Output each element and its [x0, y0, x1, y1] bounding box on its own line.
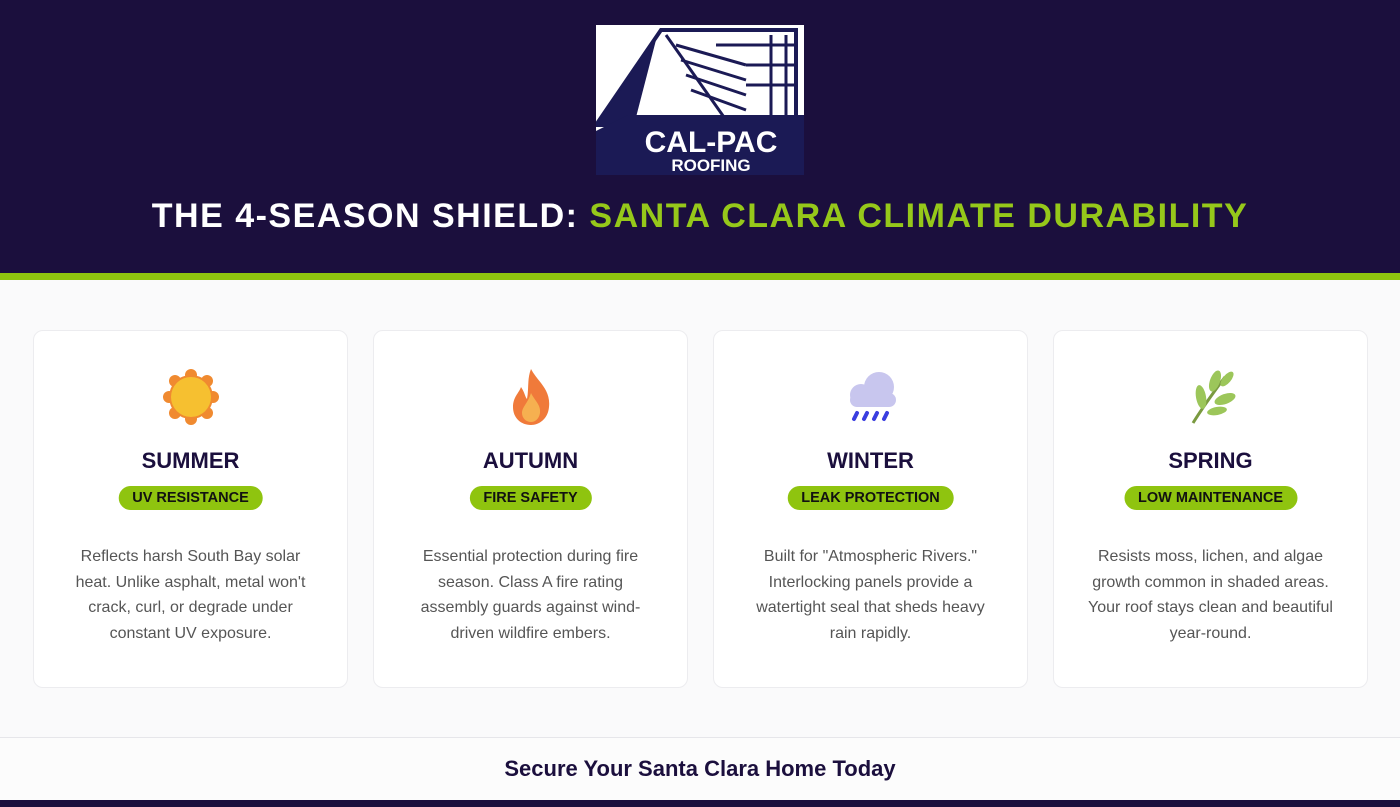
panel: winter: LEAK PROTECTION — [801, 490, 940, 506]
logo: ROOFING — [671, 156, 751, 175]
icon: sun — [163, 369, 219, 425]
panel: autumn — [373, 330, 688, 688]
icon: leaf branch — [1192, 370, 1236, 424]
panel: winter: WINTER — [827, 448, 914, 473]
panel: summer: UV RESISTANCE — [132, 490, 249, 506]
panel: autumn: FIRE SAFETY — [483, 490, 578, 506]
panel: summer: SUMMER — [142, 448, 239, 473]
panel: autumn: AUTUMN — [483, 448, 578, 473]
panel: spring — [1053, 330, 1368, 688]
panel: spring: SPRING — [1168, 448, 1253, 473]
panel: summer — [33, 330, 348, 688]
panel: winter: Built for "Atmospheric Rivers." Interlocking panels provide a watertight seal that sheds heavy rain rapidly. — [756, 548, 985, 642]
panel: autumn: Essential protection during fire season. Class A fire rating assembly guards against wind-driven wildfire embers. — [421, 548, 640, 642]
panel: summer: Reflects harsh South Bay solar heat. Unlike asphalt, metal won't crack, curl, or degrade under constant UV exposure. — [76, 548, 305, 642]
panel: spring: LOW MAINTENANCE — [1138, 490, 1283, 506]
logo — [596, 25, 804, 175]
panel: winter — [713, 330, 1028, 688]
footer call to action: Secure Your Santa Clara Home Today — [504, 756, 896, 781]
panel: spring: Resists moss, lichen, and algae growth common in shaded areas. Your roof stays clean and beautiful year-round. — [1088, 548, 1333, 642]
icon: fire — [513, 369, 550, 425]
title: THE 4-SEASON SHIELD: SANTA CLARA CLIMATE DURABILITY — [152, 197, 1248, 235]
icon: rain cloud — [850, 372, 896, 422]
logo: CAL-PAC — [645, 126, 777, 159]
header band — [0, 0, 1400, 273]
footer call to action — [0, 737, 1400, 800]
